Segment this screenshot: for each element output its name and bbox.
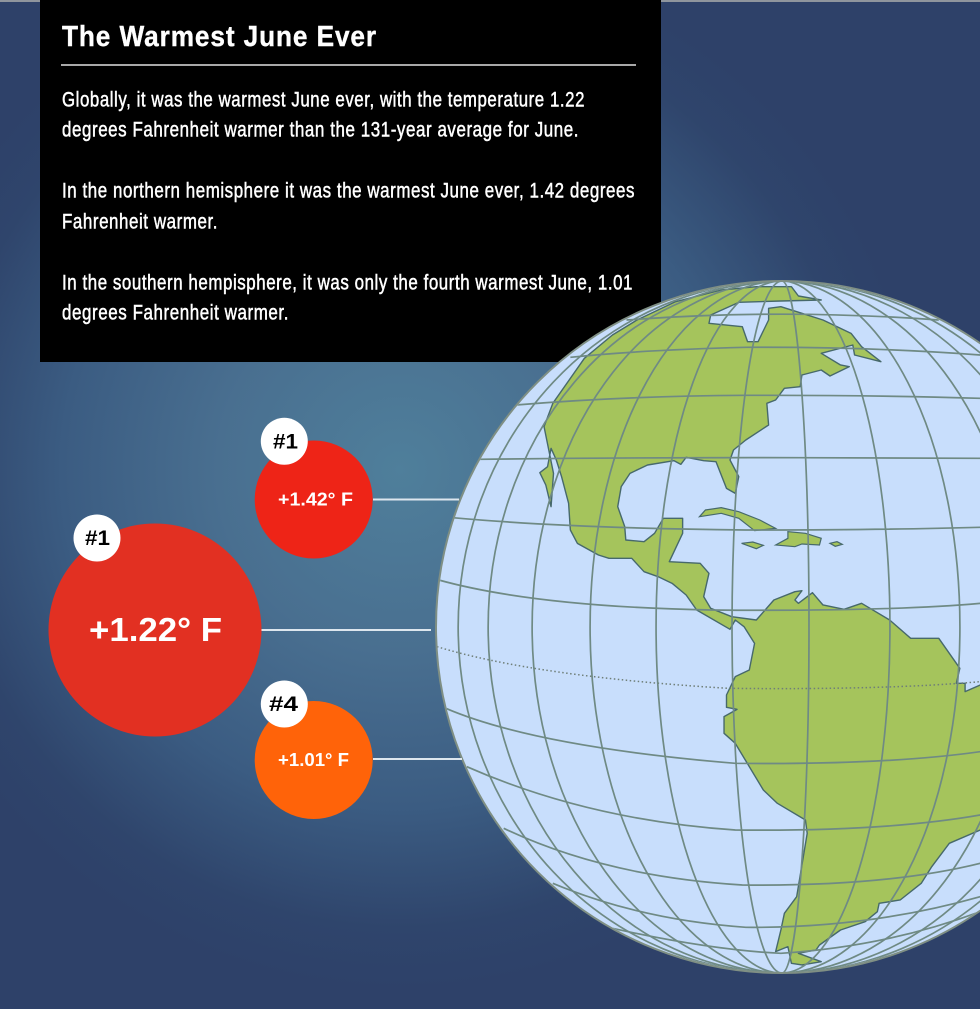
text block: northern hemisphere: Fahrenheit warmer. xyxy=(62,210,218,234)
equator xyxy=(437,647,980,689)
islands: Caribbean xyxy=(699,508,842,549)
bubble: southern hemisphere +1.01 F, rank 4: +1.01° F xyxy=(278,750,349,770)
text block: northern hemisphere xyxy=(62,180,635,234)
text block: global: degrees Fahrenheit warmer than the 131-year average for June. xyxy=(62,118,579,142)
text block: global: Globally, it was the warmest June ever, with the temperature 1.22 xyxy=(62,88,585,112)
text block: southern hemisphere: degrees Fahrenheit warmer. xyxy=(62,302,289,324)
bubble: northern hemisphere +1.42 F, rank 1 xyxy=(255,418,373,558)
text block: southern hemisphere: In the southern hempisphere, it was only the fourth warmest June, 1.01 xyxy=(62,272,633,294)
continents: North and South America xyxy=(540,287,980,965)
bubble: southern hemisphere +1.01 F, rank 4: #4 xyxy=(269,693,298,716)
bubble: northern hemisphere +1.42 F, rank 1: #1 xyxy=(273,430,298,454)
text block: northern hemisphere: In the northern hemisphere it was the warmest June ever, 1.42 degrees xyxy=(62,180,635,202)
bubble: southern hemisphere +1.01 F, rank 4 xyxy=(255,680,373,819)
bubble: global +1.22 F, rank 1 xyxy=(48,514,262,736)
heading: The Warmest June Ever xyxy=(62,21,377,53)
grid: parallels xyxy=(439,314,980,953)
globe xyxy=(436,281,980,973)
bubble: global +1.22 F, rank 1: #1 xyxy=(85,527,110,550)
grid: meridians xyxy=(458,281,980,973)
bubble: northern hemisphere +1.42 F, rank 1: +1.42° F xyxy=(278,490,353,510)
panel: summary text xyxy=(40,0,661,362)
bubble: global +1.22 F, rank 1: +1.22° F xyxy=(89,611,222,648)
top edge line xyxy=(0,0,980,2)
leader lines xyxy=(261,498,462,760)
text block: global xyxy=(62,88,585,142)
text block: southern hemisphere xyxy=(62,272,633,324)
